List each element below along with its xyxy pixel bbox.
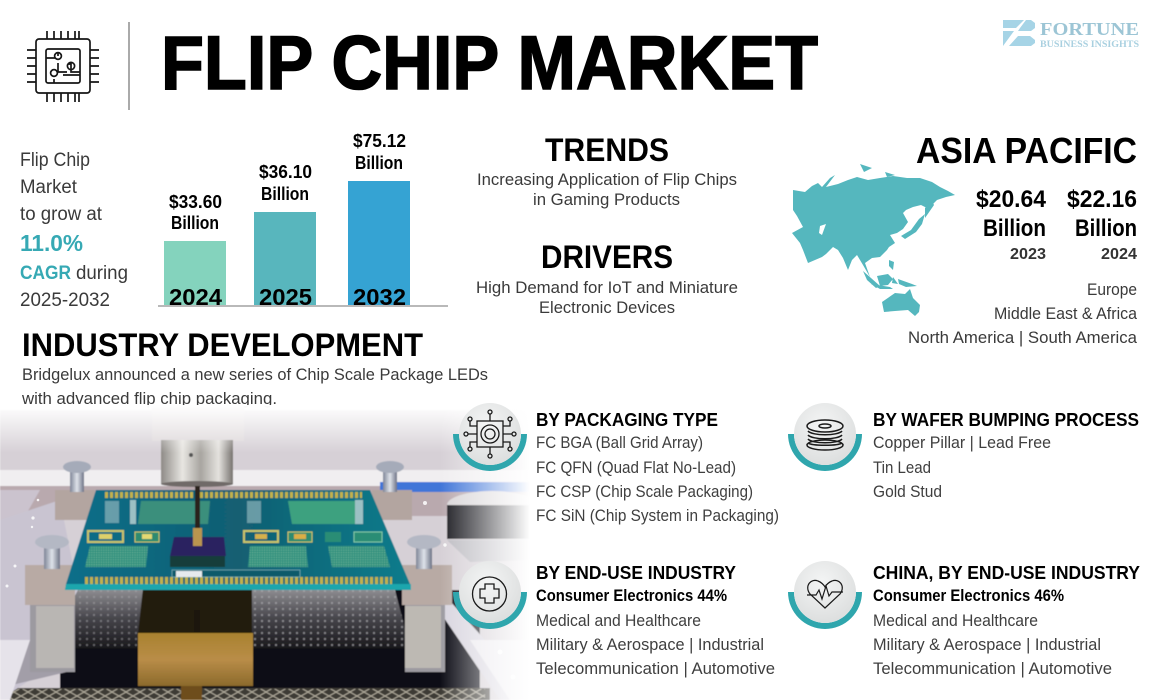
bar chart: market size: Billion bbox=[261, 184, 309, 204]
right puck bbox=[447, 491, 537, 519]
panel: industry development: Bridgelux announced a new series of Chip Scale Package LEDs bbox=[22, 365, 488, 384]
panel: Asia Pacific: 2024 bbox=[1101, 246, 1137, 263]
panel: industry development: INDUSTRY DEVELOPMENT bbox=[22, 327, 423, 363]
panel: China by end-use industry bbox=[873, 562, 1141, 678]
text: market growth CAGR bbox=[20, 150, 128, 311]
text: market growth CAGR: CAGR bbox=[20, 263, 71, 284]
panel: by end-use industry: Telecommunication | Automotive bbox=[536, 660, 775, 678]
panel: by packaging type: FC BGA (Ball Grid Array) bbox=[536, 434, 703, 452]
fades bbox=[0, 405, 530, 453]
bonding head bbox=[152, 405, 244, 441]
icon: wire spool bbox=[788, 403, 862, 471]
PCB bbox=[65, 490, 411, 590]
panel: drivers: DRIVERS bbox=[541, 239, 673, 275]
panel: Asia Pacific: $20.64 bbox=[976, 186, 1047, 213]
panel: by end-use industry: Military & Aerospace | Industrial bbox=[536, 636, 764, 654]
panel: drivers: High Demand for IoT and Miniature bbox=[476, 278, 738, 297]
panel: drivers bbox=[476, 239, 738, 317]
panel: China by end-use industry: Medical and Healthcare bbox=[873, 612, 1038, 630]
left and right silver plates bbox=[0, 490, 40, 560]
panel: Asia Pacific: 2023 bbox=[1010, 246, 1046, 263]
panel: by wafer bumping process: Tin Lead bbox=[873, 459, 931, 477]
panel: Asia Pacific: North America | South America bbox=[908, 328, 1138, 347]
bar chart: market size bbox=[158, 131, 448, 310]
panel: China by end-use industry: CHINA, BY END-USE INDUSTRY bbox=[873, 562, 1141, 583]
logo: Fortune Business Insights: BUSINESS INSIGHTS bbox=[1040, 40, 1139, 50]
panel: by packaging type: FC CSP (Chip Scale Packaging) bbox=[536, 483, 753, 501]
bar chart: market size: 2024 bbox=[169, 284, 222, 310]
panel: Asia Pacific: Europe bbox=[1087, 280, 1137, 299]
title: FLIP CHIP MARKET bbox=[161, 21, 818, 106]
panel: trends: in Gaming Products bbox=[533, 190, 680, 209]
divider bbox=[128, 22, 130, 110]
panel: industry development bbox=[21, 327, 488, 408]
panel: Asia Pacific: $22.16 bbox=[1067, 186, 1137, 213]
panel: trends: TRENDS bbox=[545, 132, 669, 168]
panel: by packaging type bbox=[536, 409, 779, 525]
text: market growth CAGR: Market bbox=[20, 177, 78, 198]
panel: Asia Pacific: Billion bbox=[1075, 215, 1137, 242]
panel: by packaging type: FC SiN (Chip System in Packaging) bbox=[536, 507, 779, 525]
panel: drivers: Electronic Devices bbox=[539, 298, 675, 317]
text: market growth CAGR: 2025-2032 bbox=[20, 290, 110, 311]
panel: by wafer bumping process: Gold Stud bbox=[873, 483, 942, 501]
logo: Fortune Business Insights: FORTUNE bbox=[1040, 19, 1139, 39]
panel: China by end-use industry: Consumer Electronics 46% bbox=[873, 587, 1064, 605]
bar chart: market size: 2032 bbox=[353, 284, 406, 310]
bar chart: market size: $33.60 bbox=[169, 192, 222, 212]
sparkles bbox=[6, 499, 516, 680]
panel: by packaging type: BY PACKAGING TYPE bbox=[536, 409, 718, 430]
bar chart: market size: $36.10 bbox=[259, 162, 312, 182]
bar chart: market size: Billion bbox=[171, 213, 219, 233]
panel: by end-use industry: BY END-USE INDUSTRY bbox=[536, 562, 737, 583]
text: market growth CAGR: during bbox=[76, 263, 128, 284]
panel: Asia Pacific: Middle East & Africa bbox=[994, 304, 1138, 323]
bar chart: market size: $75.12 bbox=[353, 131, 406, 151]
panel: Asia Pacific bbox=[908, 130, 1138, 347]
panel: China by end-use industry: Military & Aerospace | Industrial bbox=[873, 636, 1101, 654]
panel: Asia Pacific: Billion bbox=[983, 215, 1046, 242]
icon: medical cross bbox=[453, 561, 527, 629]
bar chart: market size: Billion bbox=[355, 153, 403, 173]
bar chart: market size: 2025 bbox=[259, 284, 312, 310]
lower dark chamber bbox=[60, 590, 480, 700]
panel: by packaging type: FC QFN (Quad Flat No-Lead) bbox=[536, 459, 736, 477]
text: market growth CAGR: 11.0% bbox=[20, 230, 83, 256]
panel: by end-use industry: Consumer Electronics 44% bbox=[536, 587, 727, 605]
panel: trends bbox=[477, 132, 737, 209]
panel: by wafer bumping process bbox=[873, 409, 1139, 501]
panel: by wafer bumping process: Copper Pillar | Lead Free bbox=[873, 434, 1051, 452]
icon: Asia Pacific map bbox=[792, 164, 955, 316]
panel: by end-use industry bbox=[536, 562, 775, 678]
icon: packaging type bbox=[453, 403, 527, 471]
panel: by wafer bumping process: BY WAFER BUMPING PROCESS bbox=[873, 409, 1139, 430]
gold shield bbox=[138, 588, 252, 634]
icon: heart rate bbox=[788, 561, 862, 629]
text: market growth CAGR: Flip Chip bbox=[20, 150, 90, 171]
panel: industry development: with advanced flip chip packaging. bbox=[21, 389, 277, 408]
icon: microchip bbox=[27, 31, 99, 102]
panel: China by end-use industry: Telecommunication | Automotive bbox=[873, 660, 1112, 678]
panel: Asia Pacific: ASIA PACIFIC bbox=[916, 130, 1137, 171]
text: market growth CAGR: to grow at bbox=[20, 204, 103, 225]
panel: by end-use industry: Medical and Healthcare bbox=[536, 612, 701, 630]
chip under needle bbox=[170, 537, 226, 556]
photo: flip chip bonding machine bbox=[0, 405, 550, 700]
brackets and knobs bbox=[55, 490, 95, 520]
panel: trends: Increasing Application of Flip Chips bbox=[477, 170, 737, 189]
logo: Fortune Business Insights bbox=[1003, 19, 1139, 50]
